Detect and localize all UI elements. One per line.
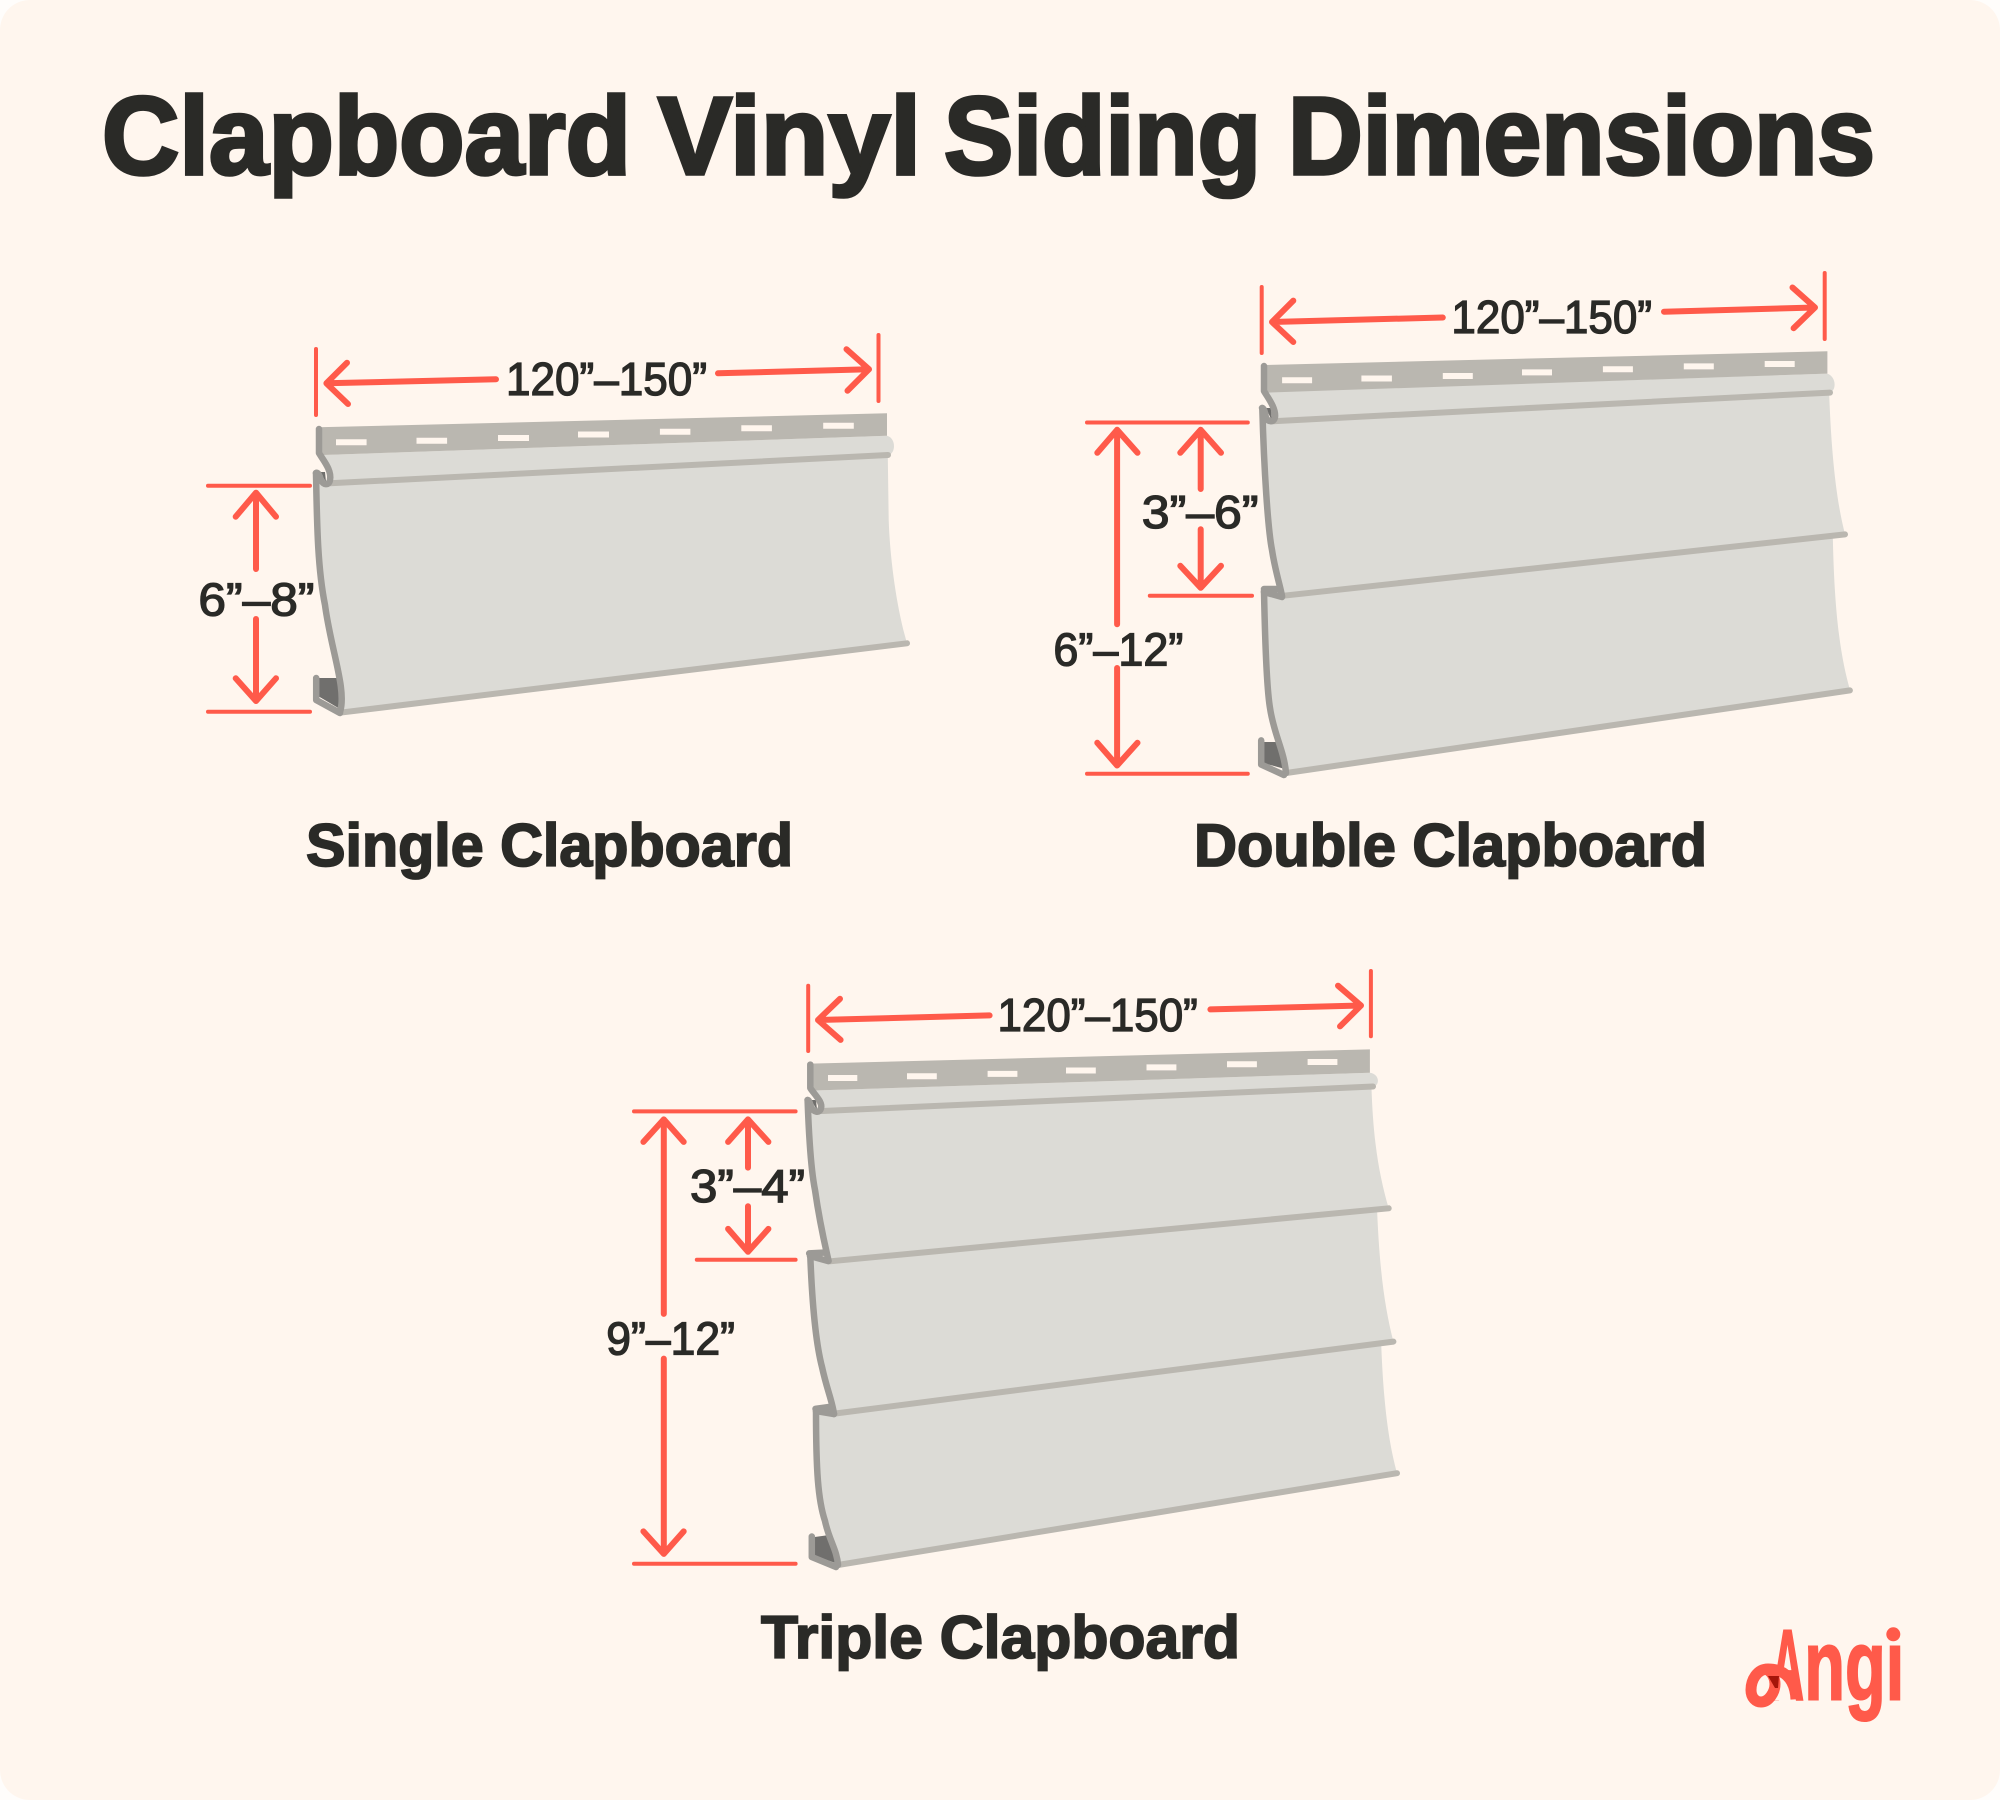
logo: Angi xyxy=(1751,1609,1904,1721)
height dimension: triple overall xyxy=(606,1111,796,1564)
height dimension: double overall: 6”–12” xyxy=(1053,624,1183,676)
siding illustration: double xyxy=(1261,351,1850,775)
logo: Angi: ngi xyxy=(1804,1609,1904,1721)
width dimension: single: 120”–150” xyxy=(506,353,707,405)
siding illustration: single xyxy=(316,413,907,713)
width dimension: triple xyxy=(808,971,1371,1051)
height dimension: triple single course xyxy=(690,1119,805,1260)
panel: double clapboard xyxy=(1053,273,1850,879)
width dimension: double xyxy=(1262,273,1825,353)
height dimension: double single course: 3”–6” xyxy=(1142,486,1258,538)
title xyxy=(102,75,1875,198)
height dimension: single xyxy=(198,486,314,712)
width dimension: single xyxy=(316,335,878,415)
height dimension: double single course xyxy=(1142,430,1258,596)
height dimension: triple overall: 9”–12” xyxy=(606,1313,735,1365)
siding illustration: triple xyxy=(808,1049,1397,1567)
label: double clapboard: Double Clapboard xyxy=(1194,812,1707,879)
title: Clapboard xyxy=(102,75,631,198)
width dimension: triple: 120”–150” xyxy=(998,989,1198,1041)
height dimension: triple single course: 3”–4” xyxy=(690,1160,805,1212)
panel: single clapboard xyxy=(198,335,907,879)
label: single clapboard: Single Clapboard xyxy=(306,812,793,879)
title: Dimensions xyxy=(1288,75,1875,198)
title: Siding xyxy=(944,75,1261,198)
height dimension: single: 6”–8” xyxy=(198,574,314,626)
width dimension: double: 120”–150” xyxy=(1451,291,1652,343)
panel: triple clapboard xyxy=(606,971,1397,1671)
label: triple clapboard: Triple Clapboard xyxy=(761,1604,1240,1671)
height dimension: double overall xyxy=(1053,422,1248,774)
title: Vinyl xyxy=(658,75,921,198)
logo: Angi: A xyxy=(1771,1609,1804,1721)
